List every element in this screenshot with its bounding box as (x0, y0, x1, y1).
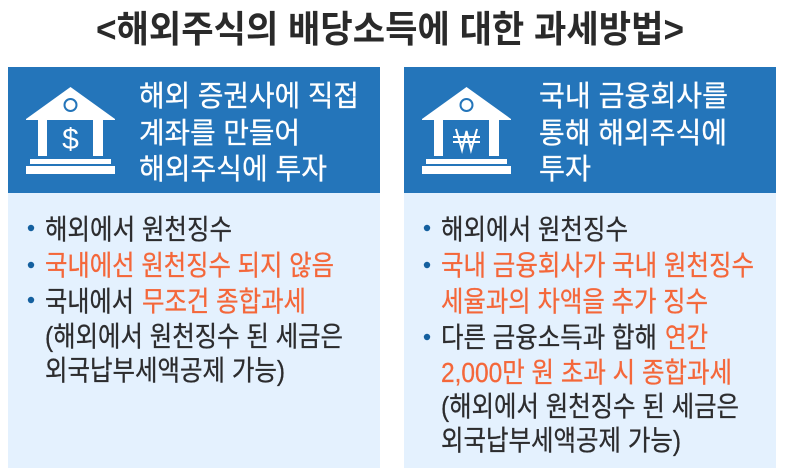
right header text: 국내 금융회사를 (539, 80, 728, 113)
right bullet list: 해외에서 원천징수 (441, 214, 628, 245)
left bullet list (28, 214, 343, 386)
left bullet list: 해외에서 원천징수 (45, 214, 232, 245)
icon: bank with dollar sign: $ (62, 123, 79, 156)
left bullet list: 국내에서 (45, 286, 134, 317)
right header text: 투자 (539, 154, 591, 186)
right bullet list (424, 214, 754, 456)
left panel header (8, 67, 380, 193)
right bullet list: 다른 금융소득과 합해 (441, 322, 657, 353)
left header text: 해외주식에 투자 (139, 154, 327, 186)
right bullet list: 2,000만 원 초과 시 종합과세 (441, 357, 732, 388)
left bullet list: 국내에선 원천징수 되지 않음 (45, 250, 334, 281)
left header text: 해외 증권사에 직접 (139, 81, 359, 113)
right bullet list: 세율과의 차액을 추가 징수 (441, 286, 708, 317)
icon: bank with dollar sign (26, 87, 115, 174)
right bullet list: 연간 (665, 322, 708, 353)
right bullet list: (해외에서 원천징수 된 세금은 (441, 391, 739, 422)
right bullet list: 국내 금융회사가 국내 원천징수 (441, 250, 754, 281)
left panel body (8, 193, 380, 468)
left header text (139, 81, 359, 186)
right header text (539, 80, 728, 186)
right bullet list: 외국납부세액공제 가능) (441, 425, 681, 456)
left bullet list: 무조건 종합과세 (142, 286, 306, 317)
left bullet list: (해외에서 원천징수 된 세금은 (45, 321, 343, 352)
icon: bank with won sign (422, 87, 511, 174)
left bullet list: 외국납부세액공제 가능) (45, 355, 285, 386)
right header text: 통해 해외주식에 (539, 118, 727, 150)
panel: direct overseas brokerage account (8, 67, 380, 468)
left header text: 계좌를 만들어 (139, 118, 300, 150)
panel: investing through domestic financial company (404, 67, 776, 468)
right panel header (404, 67, 776, 193)
title: <해외주식의 배당소득에 대한 과세방법> (96, 9, 684, 50)
right panel body (404, 193, 776, 468)
